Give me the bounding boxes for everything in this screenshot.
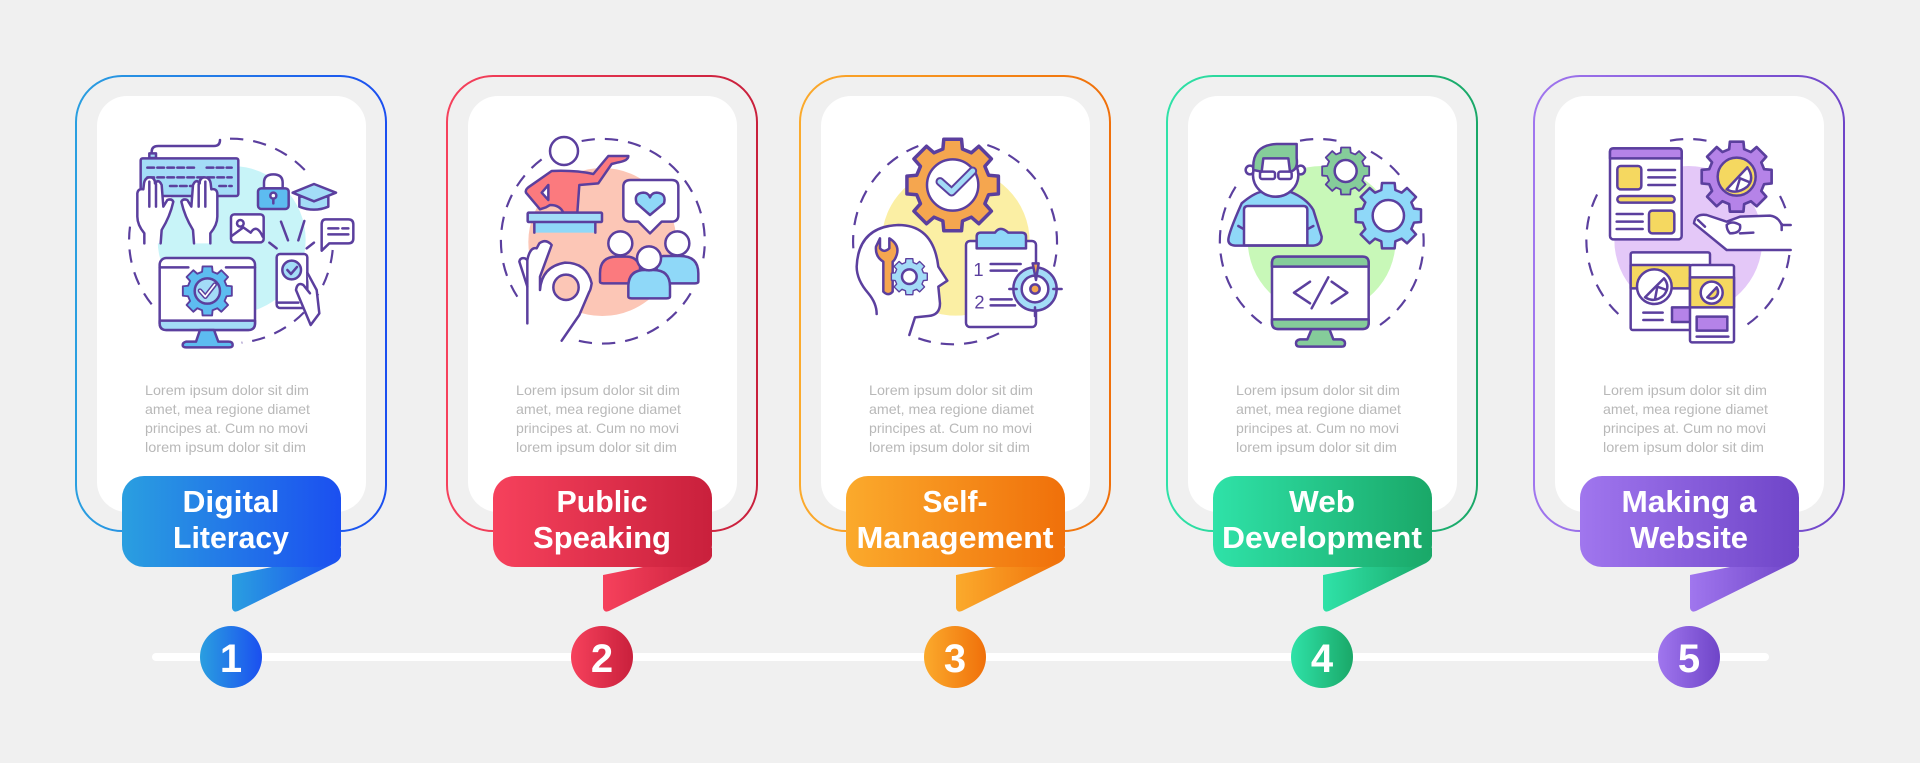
card outline [447, 76, 757, 531]
body text: amet, mea regione diamet [1603, 401, 1768, 417]
label: public speaking: Speaking [533, 520, 671, 555]
step number 2: 2 [591, 637, 613, 681]
body text [1603, 382, 1768, 455]
panel: digital literacy [76, 76, 386, 688]
body text: lorem ipsum dolor sit dim [145, 439, 306, 455]
label: self-management: Management [856, 520, 1054, 555]
white panel [1555, 96, 1824, 512]
card outline [76, 76, 386, 531]
step number 1: 1 [220, 637, 242, 681]
icon: making a website [1586, 139, 1791, 342]
label: web development [1213, 476, 1432, 612]
icon: self-management: 2 [974, 292, 985, 313]
body text [516, 382, 681, 455]
step number 5 [1658, 626, 1720, 688]
body text: amet, mea regione diamet [516, 401, 681, 417]
body text: lorem ipsum dolor sit dim [1236, 439, 1397, 455]
body text: amet, mea regione diamet [869, 401, 1034, 417]
icon: self-management [853, 139, 1062, 344]
body text: amet, mea regione diamet [1236, 401, 1401, 417]
card outline [1167, 76, 1477, 531]
icon: web development [1220, 139, 1424, 347]
white panel [821, 96, 1090, 512]
icon: self-management: 1 [973, 259, 984, 280]
step number 3 [924, 626, 986, 688]
body text: principes at. Cum no movi [1603, 420, 1766, 436]
body text: Lorem ipsum dolor sit dim [869, 382, 1033, 398]
body text: Lorem ipsum dolor sit dim [1603, 382, 1767, 398]
body text: principes at. Cum no movi [516, 420, 679, 436]
body text: principes at. Cum no movi [869, 420, 1032, 436]
step number 3: 3 [944, 637, 966, 681]
panel: making a website [1534, 76, 1844, 688]
panel: self-management [800, 76, 1110, 688]
card outline [800, 76, 1110, 531]
label: making a website: Making a [1622, 484, 1757, 519]
step number 5: 5 [1678, 637, 1700, 681]
white panel [1188, 96, 1457, 512]
step number 1 [200, 626, 262, 688]
label: web development: Web [1289, 484, 1355, 519]
icon: digital literacy [129, 139, 353, 347]
body text: lorem ipsum dolor sit dim [869, 439, 1030, 455]
body text: amet, mea regione diamet [145, 401, 310, 417]
timeline line [152, 653, 1769, 661]
icon: public speaking [501, 137, 705, 344]
panel: public speaking [447, 76, 757, 688]
body text [869, 382, 1034, 455]
label: web development: Development [1222, 520, 1422, 555]
body text: lorem ipsum dolor sit dim [1603, 439, 1764, 455]
body text [145, 382, 310, 455]
step number 4: 4 [1311, 637, 1334, 681]
label: digital literacy [122, 476, 341, 612]
label: digital literacy: Digital [182, 484, 280, 519]
step number 4 [1291, 626, 1353, 688]
label: making a website [1580, 476, 1799, 612]
body text [1236, 382, 1401, 455]
body text: Lorem ipsum dolor sit dim [145, 382, 309, 398]
label: self-management [846, 476, 1065, 612]
body text: principes at. Cum no movi [1236, 420, 1399, 436]
label: self-management: Self- [922, 484, 988, 519]
white panel [97, 96, 366, 512]
label: public speaking [493, 476, 712, 612]
step number 2 [571, 626, 633, 688]
panel: web development [1167, 76, 1477, 688]
body text: Lorem ipsum dolor sit dim [516, 382, 680, 398]
body text: lorem ipsum dolor sit dim [516, 439, 677, 455]
body text: principes at. Cum no movi [145, 420, 308, 436]
body text: Lorem ipsum dolor sit dim [1236, 382, 1400, 398]
label: public speaking: Public [556, 484, 648, 519]
card outline [1534, 76, 1844, 531]
label: making a website: Website [1630, 520, 1748, 555]
label: digital literacy: Literacy [173, 520, 290, 555]
white panel [468, 96, 737, 512]
